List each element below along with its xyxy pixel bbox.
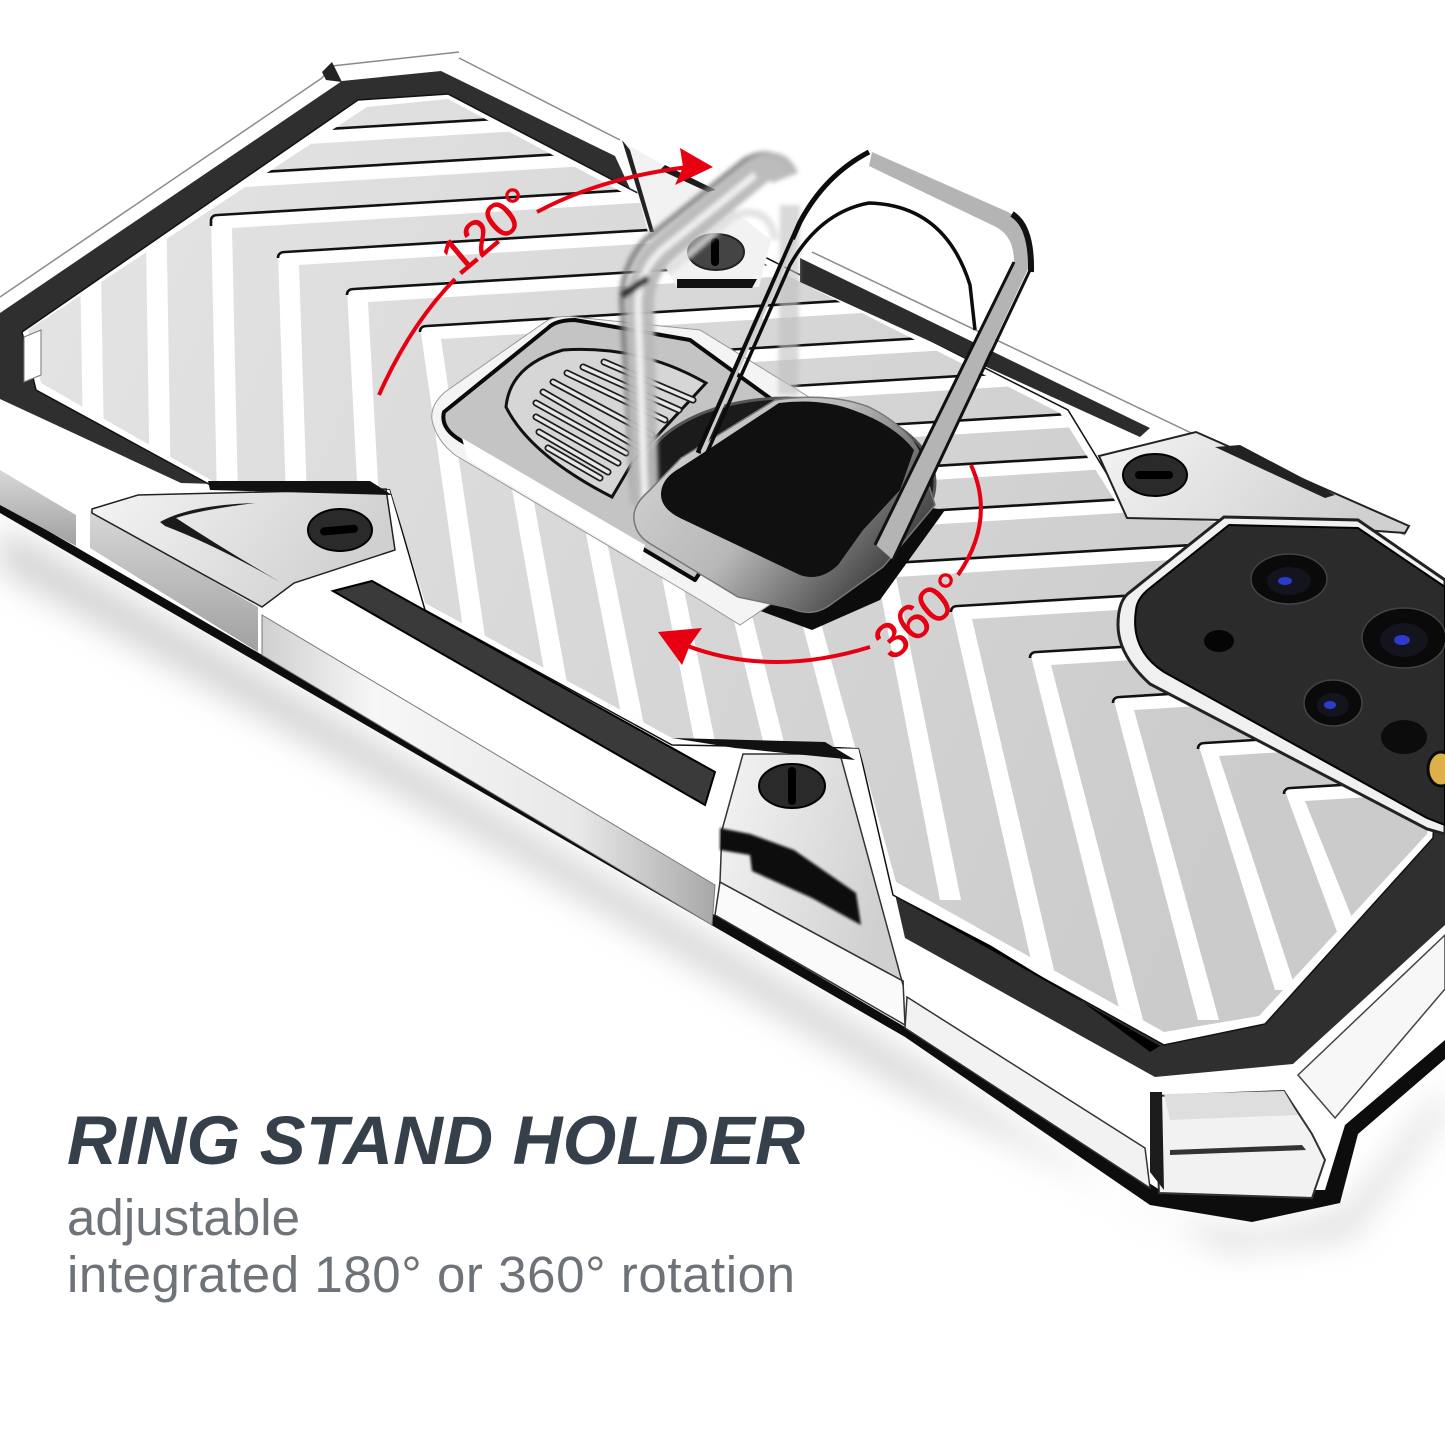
black strip centre-left: [333, 581, 715, 805]
icon: lens 3: [1304, 680, 1362, 726]
title: RING STAND HOLDER: [67, 1102, 805, 1179]
arrowhead: [658, 628, 702, 665]
ring head: [634, 397, 935, 612]
ghost ring position: [622, 154, 790, 505]
ring outer left edge: [698, 152, 869, 453]
bracket plate: [624, 143, 771, 287]
side panel left: [0, 470, 76, 546]
left end window: [24, 330, 41, 382]
ring top and right bar: [869, 152, 1033, 560]
base outer rim: [432, 317, 880, 625]
label 360: 360°: [863, 561, 978, 670]
white inner rim: [22, 94, 1445, 1045]
arrow: 360 degree rotation: [658, 465, 981, 670]
white chevrons: [78, 102, 1445, 1020]
ring right bar edge: [875, 262, 1031, 560]
ring stand raised: [698, 152, 1033, 560]
base plate: [443, 320, 800, 580]
bracket top bar: [672, 738, 855, 760]
bracket lower centre: [672, 738, 905, 1025]
bracket reflection: [160, 503, 280, 582]
grill recess: [506, 349, 706, 497]
icon: screw: [688, 234, 744, 270]
bracket plate: [1099, 432, 1409, 533]
camera module: [1118, 517, 1445, 834]
arrowhead: [675, 148, 713, 185]
ghost inner arch: [668, 213, 775, 272]
black frame: [0, 71, 1445, 1077]
lower right gloss: [898, 897, 1160, 1052]
corner block: [1155, 1091, 1325, 1198]
icon: sensor: [1381, 720, 1427, 754]
ring holder: [432, 152, 1033, 630]
ghost dark edge: [622, 154, 790, 505]
black groove lines: [210, 118, 1342, 794]
arc bottom: [685, 645, 870, 662]
icon: microphone hole: [1204, 630, 1234, 652]
base white lip: [462, 438, 645, 562]
chevron panel: [0, 60, 1445, 1060]
bracket plate: [92, 489, 395, 607]
corner grey top: [1164, 1091, 1298, 1120]
ghost left bar: [640, 166, 785, 505]
ghost dark bend: [622, 278, 648, 296]
corner dark edge: [1150, 1092, 1164, 1190]
bracket strip: [1215, 445, 1335, 498]
grill slat highlights: [536, 362, 693, 478]
arrow: 120 degree rotation: [379, 148, 713, 395]
arc right: [958, 465, 981, 575]
corner bumper: [1150, 935, 1445, 1198]
corner band: [1170, 1145, 1306, 1155]
icon: lens 2: [1362, 608, 1445, 668]
bracket plate: [720, 754, 903, 985]
camera plate: [1135, 525, 1445, 825]
corner right band: [1298, 935, 1445, 1118]
ring head black pad: [661, 402, 914, 577]
bracket lower-left: [92, 481, 395, 607]
bracket top bar: [208, 481, 392, 495]
top corner nick: [322, 62, 342, 82]
ring dark bend: [1012, 214, 1031, 272]
drop shadow: [0, 525, 1445, 1250]
black bottom bumper: [0, 480, 1445, 1222]
bracket dark bar: [677, 279, 757, 288]
panel base: [0, 60, 1445, 1060]
label 120: 120°: [430, 176, 545, 285]
edge outline: [0, 52, 1405, 535]
bracket top behind ring: [622, 140, 771, 288]
base shadow: [690, 500, 945, 630]
arc lower: [379, 279, 455, 395]
side band white: [715, 882, 905, 1025]
chrome body: [0, 50, 1445, 1190]
icon: lens 1: [1251, 554, 1327, 604]
subtitle line 1: adjustable: [67, 1189, 300, 1246]
camera rim: [1118, 517, 1445, 834]
top black strip piece: [660, 165, 716, 192]
icon: screw: [759, 764, 825, 808]
ring inner left edge: [706, 203, 975, 455]
ghost highlight: [638, 175, 755, 505]
icon: screw: [1123, 454, 1187, 496]
grill slats: [536, 362, 693, 478]
side panel middle: [262, 615, 715, 925]
pivot disk: [639, 398, 935, 568]
side panel second: [90, 510, 258, 652]
bracket right: [1099, 432, 1409, 533]
side panel right: [905, 997, 1150, 1188]
ring left bar shine: [702, 240, 795, 452]
subtitle line 2: integrated 180° or 360° rotation: [67, 1246, 795, 1303]
icon: flash: [1428, 752, 1445, 786]
bracket reflection: [720, 828, 861, 925]
ghost right bar: [788, 205, 790, 395]
bracket spike: [622, 140, 654, 232]
icon: screw: [308, 509, 372, 551]
arc upper: [537, 167, 688, 212]
black strip top right: [800, 258, 1150, 437]
